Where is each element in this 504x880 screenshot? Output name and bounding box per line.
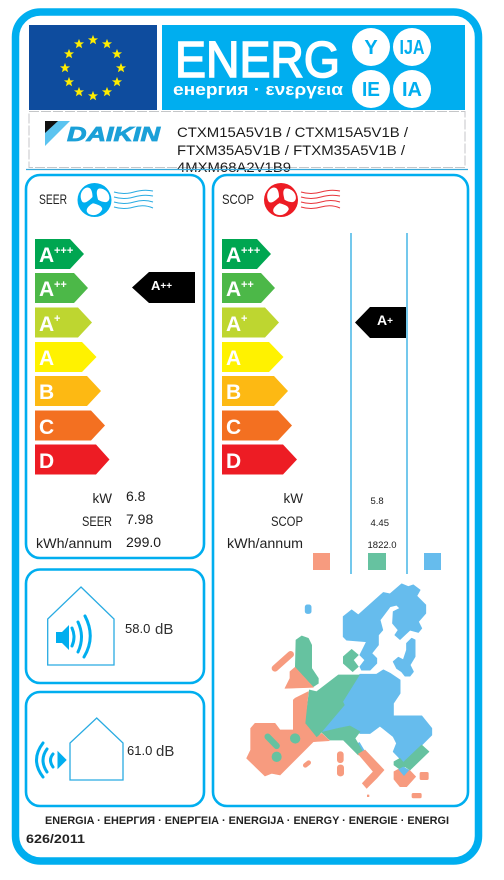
SEER heading: SEER	[39, 191, 67, 207]
icon: warm air waves	[301, 190, 340, 208]
subtitle: енергия · ενεργεια	[173, 80, 344, 99]
rating marker A+: +	[387, 316, 393, 327]
icon: cooling fan	[78, 183, 112, 218]
SEER values: 6.8	[126, 488, 146, 504]
SCOP values: 5.8	[370, 496, 384, 507]
scale arrows: C	[39, 416, 54, 439]
SEER values: 299.0	[126, 534, 161, 550]
Daikin logo: DAIKIN	[67, 124, 161, 146]
SCOP labels: kWh/annum	[227, 536, 303, 551]
icon: house with indoor speaker	[48, 587, 114, 665]
circle letters	[362, 37, 424, 101]
scale arrows: A	[39, 244, 54, 267]
indoor noise unit: dB	[155, 621, 173, 638]
circle letters: IE	[362, 79, 380, 101]
Daikin logo	[45, 121, 161, 146]
rating marker A+	[355, 307, 406, 338]
SEER labels: kWh/annum	[36, 536, 112, 551]
scale arrows: D	[226, 450, 241, 473]
climate column lines	[351, 233, 407, 574]
scale arrows: A	[226, 313, 241, 336]
climate map of Europe	[247, 584, 432, 798]
model names	[177, 125, 408, 175]
scale arrows: +++	[241, 245, 260, 257]
outdoor noise value: 61.0	[127, 743, 152, 758]
model names: 4MXM68A2V1B9	[177, 160, 291, 175]
SEER labels: SEER	[82, 514, 112, 529]
rating marker A+: A	[377, 312, 387, 328]
scale arrows: ++	[241, 279, 254, 291]
regulation number: 626/2011	[26, 832, 85, 846]
rating marker A++	[132, 272, 195, 303]
panel: indoor noise	[26, 570, 204, 683]
supplier box	[29, 112, 465, 168]
energy banner	[162, 25, 465, 110]
SCOP values: 4.45	[370, 518, 389, 529]
SCOP heading: SCOP	[222, 191, 254, 207]
scale arrows: A	[39, 313, 54, 336]
model names: FTXM35A5V1B / FTXM35A5V1B /	[177, 143, 405, 158]
indoor noise value: 58.0	[125, 621, 150, 636]
climate legend	[313, 553, 441, 570]
circle letters: IJA	[400, 37, 424, 59]
letter circles	[352, 28, 431, 108]
SCOP values	[368, 496, 397, 551]
icon: house with outdoor speaker	[36, 718, 123, 780]
scale arrows	[222, 239, 297, 474]
circle letters: IA	[402, 79, 422, 101]
SEER values: 7.98	[126, 511, 153, 527]
SEER values	[126, 488, 161, 550]
scale arrows: D	[39, 450, 54, 473]
icon: heating fan	[264, 183, 299, 218]
panel: outdoor noise	[26, 692, 204, 806]
scale arrows: +++	[54, 245, 73, 257]
scale arrows: +	[241, 313, 247, 325]
title: ENERG: ENERG	[175, 31, 340, 88]
outdoor noise unit: dB	[156, 743, 174, 760]
scale arrows: A	[226, 347, 241, 370]
circle letters: Y	[364, 37, 378, 59]
SEER labels: kW	[92, 491, 112, 506]
scale arrows: A	[39, 347, 54, 370]
panel: SCOP	[213, 175, 468, 806]
footer energy words: ENERGIA · ЕНЕРГИЯ · ΕΝΕΡΓΕΙΑ · ENERGIJA · ENERGY · ENERGIE · ENERGI	[45, 815, 449, 827]
rating marker A++: A	[151, 278, 160, 293]
SCOP values: 1822.0	[368, 540, 397, 551]
rating marker A++: ++	[160, 281, 172, 292]
scale arrows: A	[39, 278, 54, 301]
SEER labels	[36, 491, 112, 551]
scale arrows: A	[226, 244, 241, 267]
scale arrows	[35, 239, 110, 474]
icon: cool air waves	[114, 190, 153, 208]
scale arrows: A	[226, 278, 241, 301]
scale arrows: B	[226, 381, 241, 404]
panel: SEER	[26, 175, 204, 558]
SCOP labels	[227, 491, 303, 551]
scale arrows: +	[54, 313, 60, 325]
scale arrows: B	[39, 381, 54, 404]
scale arrows: C	[226, 416, 241, 439]
scale arrows: ++	[54, 279, 67, 291]
EU flag	[29, 25, 157, 110]
SCOP labels: kW	[284, 491, 303, 506]
model names: CTXM15A5V1B / CTXM15A5V1B /	[177, 125, 408, 140]
SCOP labels: SCOP	[271, 514, 303, 529]
